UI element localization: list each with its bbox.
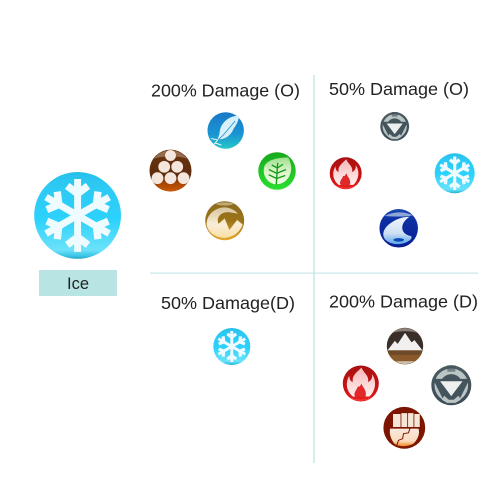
panel: 200% damage defense — [329, 292, 478, 449]
icon: grass — [258, 152, 296, 190]
icon: ice — [213, 328, 250, 365]
heading: 50% Damage(D): 50% Damage(D) — [161, 293, 295, 313]
icon: rock mountain — [387, 328, 423, 364]
panel: 50% damage defense — [161, 293, 295, 365]
vertical divider — [314, 75, 315, 463]
heading: 200% Damage (D): 200% Damage (D) — [329, 292, 478, 312]
heading: 200% Damage (O): 200% Damage (O) — [151, 81, 300, 101]
panel: 50% damage offense — [329, 79, 475, 248]
panel: 200% damage offense — [150, 81, 300, 240]
icon: fire — [330, 157, 362, 189]
icon: fighting fist — [383, 407, 425, 449]
icon: ice — [435, 153, 475, 193]
ice label box — [39, 270, 117, 296]
icon: water — [379, 209, 418, 248]
icon: fire — [343, 366, 379, 402]
icon: large ice orb — [34, 172, 121, 259]
heading: 50% Damage (O): 50% Damage (O) — [329, 79, 469, 99]
icon: ground — [205, 201, 244, 240]
icon: steel — [431, 365, 471, 405]
horizontal divider — [150, 273, 478, 274]
icon: flying — [208, 112, 244, 149]
ice label box: Ice — [67, 275, 89, 293]
icon: rock — [150, 150, 192, 192]
icon: steel — [380, 112, 409, 141]
